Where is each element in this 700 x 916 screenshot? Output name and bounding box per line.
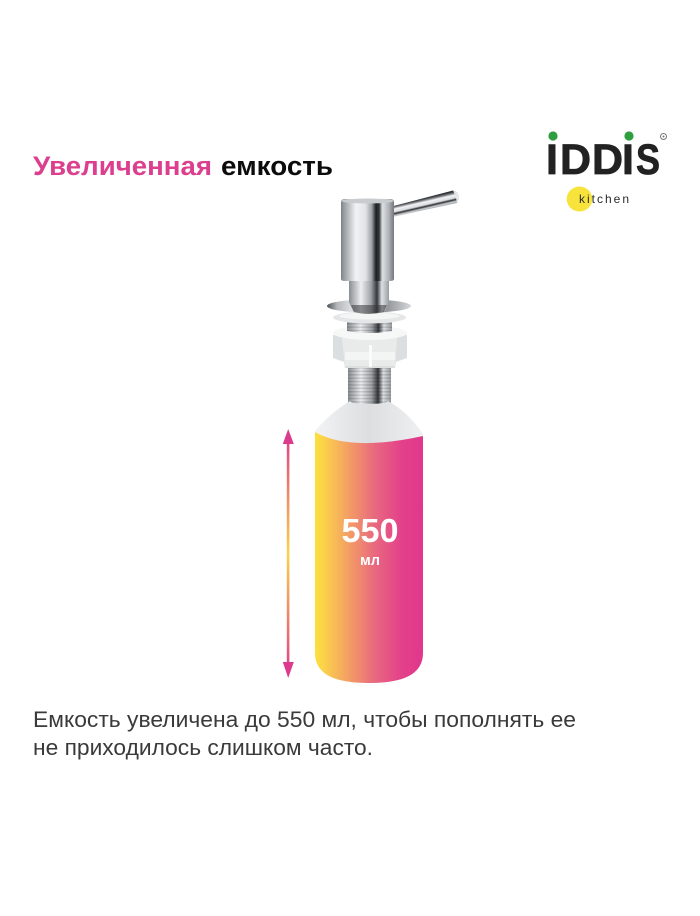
bottle body gradient [315,432,423,683]
washer [333,312,406,324]
handle [382,190,459,218]
bottle shoulder [315,401,423,446]
logo: IDDIS kitchen: kitchen [579,192,629,206]
dispenser pump [327,190,459,404]
logo: IDDIS kitchen: S [636,136,660,184]
description text: не приходилось слишком часто. [33,735,373,760]
double-headed height arrow [283,429,294,678]
bottle [315,401,423,683]
title: Увеличенная [33,151,212,181]
neck [349,280,389,314]
logo: IDDIS kitchen [546,131,666,212]
volume value: 550 [342,512,398,549]
pump head [341,198,394,281]
plastic nut [333,326,407,368]
threaded lower shank [348,362,391,404]
title: емкость [221,151,333,181]
logo: IDDIS kitchen: IDDI [546,136,634,184]
upper short thread [347,320,392,333]
title [33,151,333,181]
volume unit: мл [360,553,380,569]
description text [33,707,576,760]
description text: Емкость увеличена до 550 мл, чтобы пополнять ее [33,707,576,732]
flange [327,300,411,312]
